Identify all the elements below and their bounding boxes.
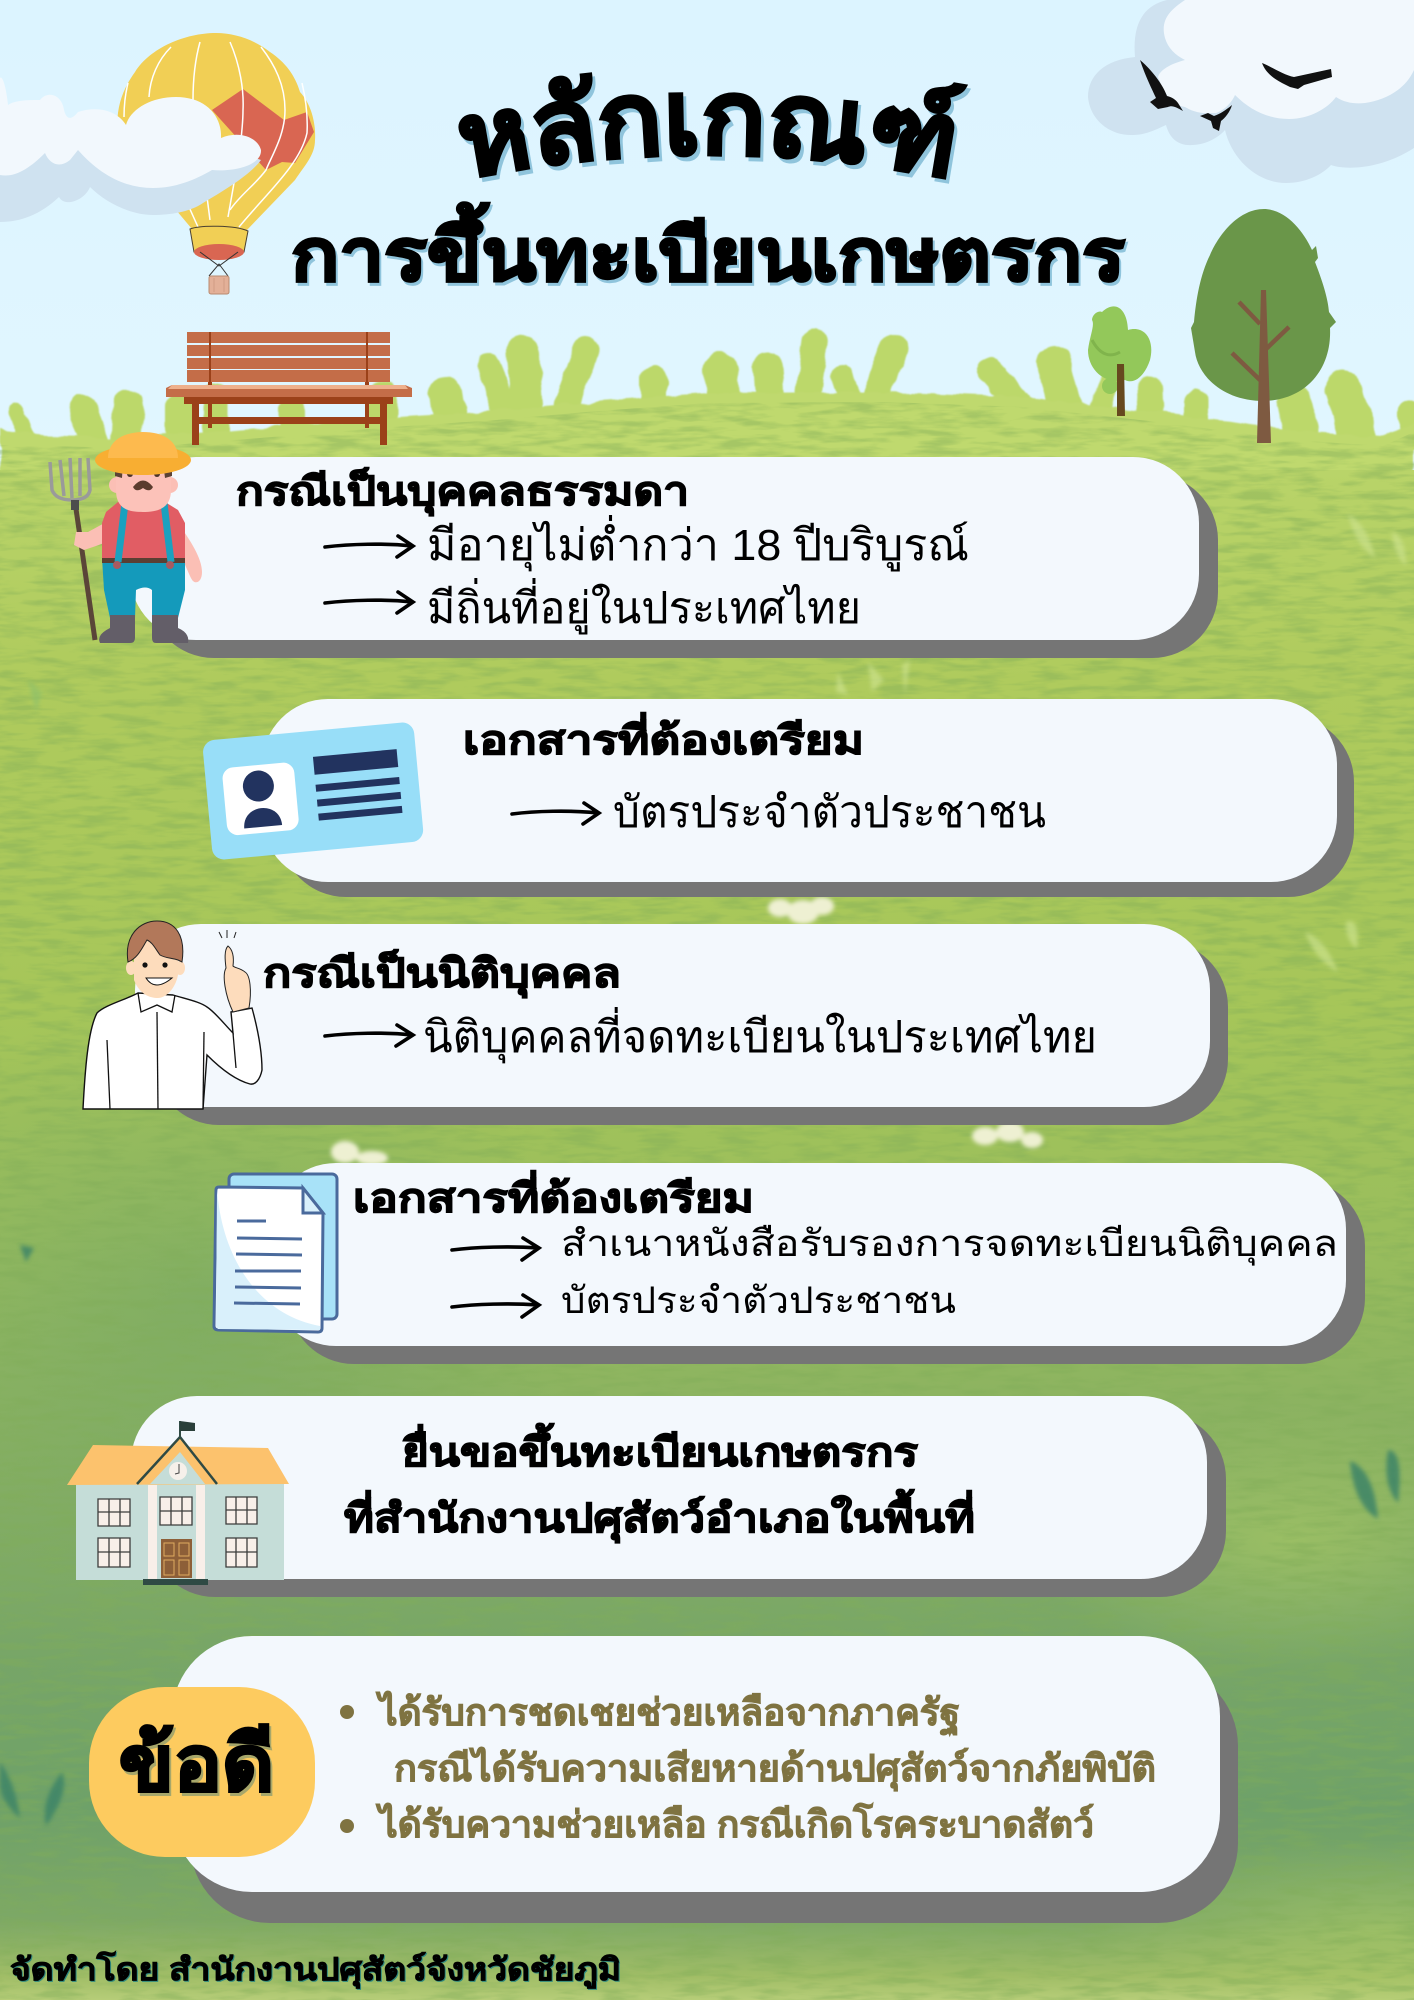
icon: right cloud (1088, 0, 1414, 183)
title: หลักเกณฑ์ (458, 72, 971, 184)
decoration: grass blades and flowers (0, 514, 1406, 1826)
arrow (325, 592, 413, 613)
heading: documents: เอกสารที่ต้องเตรียม (353, 1170, 754, 1221)
text: benefit 1 line 1: ได้รับการชดเชยช่วยเหลือจากภาครัฐ (375, 1690, 960, 1736)
heading: natural person: กรณีเป็นบุคคลธรรมดา (236, 466, 689, 517)
text: id card: บัตรประจำตัวประชาชน (613, 788, 1046, 837)
heading: documents: เอกสารที่ต้องเตรียม (463, 712, 864, 763)
panel 3: juristic person (135, 924, 1228, 1125)
heading: juristic person: กรณีเป็นนิติบุคคล (263, 948, 621, 999)
background: sky (0, 0, 1414, 460)
icon: government building (67, 1421, 289, 1585)
arrow (325, 536, 413, 557)
icon: left cloud (0, 77, 261, 222)
badge label: ข้อดี (119, 1722, 274, 1807)
footer credit: จัดทำโดย สำนักงานปศุสัตว์จังหวัดชัยภูมิ (10, 1951, 621, 1989)
panel 2: documents (262, 699, 1354, 897)
icon: small tree (1088, 306, 1151, 416)
bullet (340, 1705, 354, 1719)
arrow (452, 1295, 539, 1317)
panel 6: benefits (172, 1636, 1238, 1923)
icon: documents (214, 1174, 337, 1332)
text: domicile requirement: มีถิ่นที่อยู่ในประเทศไทย (427, 577, 861, 635)
panel 4: documents for juristic person (270, 1163, 1365, 1364)
text: juristic requirement: นิติบุคคลที่จดทะเบียนในประเทศไทย (423, 1006, 1097, 1064)
subtitle: การขึ้นทะเบียนเกษตรกร (291, 202, 1125, 296)
arrow (512, 803, 599, 824)
icon: birds (1140, 60, 1332, 131)
text: benefit 1 line 2: กรณีได้รับความเสียหายด้านปศุสัตว์จากภัยพิบัติ (394, 1746, 1156, 1792)
panel 5: submit registration (131, 1396, 1226, 1597)
text: benefit 2: ได้รับความช่วยเหลือ กรณีเกิดโรคระบาดสัตว์ (375, 1802, 1094, 1845)
text: age requirement: มีอายุไม่ต่ำกว่า 18 ปีบริบูรณ์ (427, 514, 969, 572)
icon: hot air balloon (117, 33, 315, 294)
icon: ID card (202, 721, 424, 861)
panel 1: natural person (130, 457, 1218, 658)
text: submit line 2: ที่สำนักงานปศุสัตว์อำเภอในพื้นที่ (344, 1489, 975, 1544)
text: submit line 1: ยื่นขอขึ้นทะเบียนเกษตรกร (402, 1423, 919, 1475)
badge: benefits (89, 1687, 315, 1857)
text: registration certificate: สำเนาหนังสือรับรองการจดทะเบียนนิติบุคคล (561, 1223, 1338, 1266)
text: id card: บัตรประจำตัวประชาชน (561, 1280, 956, 1321)
icon: bench (166, 332, 412, 445)
bullet (340, 1819, 354, 1833)
icon: man pointing (83, 921, 262, 1109)
icon: large tree (1191, 209, 1336, 443)
arrow (325, 1025, 413, 1046)
icon: farmer (50, 432, 202, 643)
arrow (452, 1238, 539, 1260)
